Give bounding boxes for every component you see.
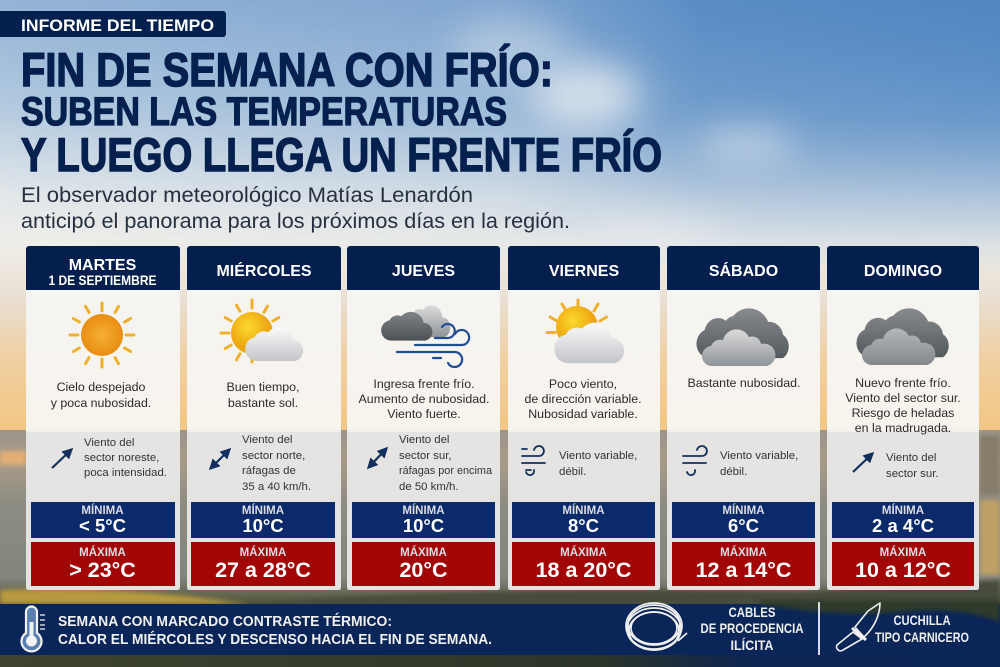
footer band <box>0 600 1000 655</box>
maximum temperature: MÁXIMA <box>720 546 767 559</box>
panel: viernes <box>508 246 660 590</box>
text: description: Cielo despejado <box>57 380 146 394</box>
panel: jueves <box>347 246 500 590</box>
text: footer message: SEMANA CON MARCADO CONTRASTE TÉRMICO: <box>58 613 392 630</box>
text: wind: Viento del <box>242 434 292 446</box>
maximum temperature: 20°C <box>399 558 448 582</box>
minimum temperature: MÍNIMA <box>882 504 924 517</box>
header: miércoles <box>187 246 341 290</box>
text: description <box>524 377 642 421</box>
maximum temperature: MÁXIMA <box>240 546 286 559</box>
text: wind <box>886 452 939 480</box>
text: description <box>51 380 151 410</box>
header: domingo <box>827 246 979 290</box>
icon: sun behind cloud <box>547 300 624 363</box>
panel: domingo <box>827 246 979 590</box>
text: wind <box>84 437 167 479</box>
text: wind: Viento del <box>399 434 449 446</box>
panel: sábado <box>667 246 820 590</box>
icon: sun <box>70 303 134 367</box>
text: description: y poca nubosidad. <box>51 396 151 410</box>
header: martes <box>26 246 180 290</box>
text: wind: de 50 km/h. <box>399 481 459 493</box>
tag: informe del tiempo <box>0 11 226 37</box>
icon: storm clouds <box>696 308 789 366</box>
minimum temperature: MÍNIMA <box>242 504 284 517</box>
icon: wind arrow <box>853 454 872 472</box>
text: cables: ILÍCITA <box>730 637 774 653</box>
text: wind <box>399 434 493 493</box>
title <box>21 43 662 181</box>
text: description: Bastante nubosidad. <box>688 376 800 390</box>
maximum temperature: 18 a 20°C <box>536 558 631 582</box>
text: footer message <box>58 613 492 648</box>
text: wind: sector sur, <box>399 450 452 462</box>
tag: informe del tiempo: INFORME DEL TIEMPO <box>21 16 214 35</box>
maximum temperature <box>832 542 974 586</box>
text: cables: DE PROCEDENCIA <box>700 620 804 636</box>
minimum temperature: MÍNIMA <box>722 504 765 517</box>
subtitle: El observador meteorológico Matías Lenardón <box>21 184 473 207</box>
minimum temperature: 2 a 4°C <box>872 515 934 536</box>
text: description <box>845 376 961 435</box>
text: wind: sector norte, <box>242 450 305 462</box>
minimum temperature <box>832 502 974 538</box>
minimum temperature: MÍNIMA <box>562 504 605 517</box>
panel: miércoles <box>187 246 341 590</box>
title: FIN DE SEMANA CON FRÍO: <box>21 43 553 96</box>
text: wind: 35 a 40 km/h. <box>242 481 311 493</box>
icon: light wind <box>522 446 545 475</box>
icon: cable coil <box>626 603 687 650</box>
subtitle <box>21 184 570 233</box>
minimum temperature <box>31 502 175 538</box>
text: description: de dirección variable. <box>524 392 642 406</box>
text: description <box>359 377 489 421</box>
text: wind: Viento variable, <box>559 450 637 462</box>
text: description: en la madrugada. <box>855 421 951 435</box>
maximum temperature: MÁXIMA <box>79 546 126 559</box>
text: description: Riesgo de heladas <box>852 406 954 420</box>
text: knife: TIPO CARNICERO <box>875 629 969 645</box>
minimum temperature: 8°C <box>568 515 599 536</box>
minimum temperature: MÍNIMA <box>81 504 124 517</box>
header: sábado <box>667 246 820 290</box>
text: wind: Viento del <box>84 437 134 449</box>
header: domingo: DOMINGO <box>864 263 942 280</box>
maximum temperature: 12 a 14°C <box>696 558 791 582</box>
panel: martes <box>26 246 180 590</box>
text: wind: ráfagas por encima <box>399 465 493 477</box>
maximum temperature: > 23°C <box>69 558 136 582</box>
minimum temperature: 10°C <box>403 515 444 536</box>
icon: storm clouds <box>856 308 949 365</box>
text: knife: CUCHILLA <box>894 612 950 628</box>
header: jueves: JUEVES <box>392 263 455 280</box>
text: description: Ingresa frente frío. <box>373 377 475 391</box>
text: wind: Viento variable, <box>720 450 798 462</box>
minimum temperature <box>672 502 815 538</box>
text: knife <box>875 612 969 645</box>
text: description: Viento del sector sur. <box>845 391 961 405</box>
title: Y LUEGO LLEGA UN FRENTE FRÍO <box>21 128 662 181</box>
icon: double arrow <box>369 449 386 467</box>
text: description: Buen tiempo, <box>226 380 300 394</box>
text: description <box>226 380 300 410</box>
title: SUBEN LAS TEMPERATURAS <box>21 90 507 134</box>
header: jueves <box>347 246 500 290</box>
maximum temperature <box>352 542 495 586</box>
text: description: bastante sol. <box>228 396 298 410</box>
text: cables <box>700 604 804 653</box>
text: footer message: CALOR EL MIÉRCOLES Y DESCENSO HACIA EL FIN DE SEMANA. <box>58 631 492 648</box>
icon: clouds and wind <box>381 305 469 367</box>
text: wind: sector noreste, <box>84 452 159 464</box>
maximum temperature: MÁXIMA <box>400 546 447 559</box>
minimum temperature: 10°C <box>242 515 284 536</box>
text: description: Nuevo frente frío. <box>855 376 951 390</box>
minimum temperature <box>512 502 655 538</box>
maximum temperature <box>512 542 655 586</box>
text: wind <box>720 450 798 478</box>
minimum temperature: < 5°C <box>79 515 126 536</box>
text: wind: poca intensidad. <box>84 467 167 479</box>
maximum temperature <box>31 542 175 586</box>
text: wind <box>559 450 637 478</box>
text: wind <box>242 434 311 493</box>
text: description: Aumento de nubosidad. <box>359 392 489 406</box>
header: martes: 1 DE SEPTIEMBRE <box>48 272 156 288</box>
text: wind: Viento del <box>886 452 936 464</box>
text: wind: sector sur. <box>886 468 939 480</box>
maximum temperature: 10 a 12°C <box>855 558 951 582</box>
text: wind: débil. <box>720 466 747 478</box>
maximum temperature: 27 a 28°C <box>215 558 311 582</box>
header: viernes <box>508 246 660 290</box>
icon: double arrow <box>211 450 229 468</box>
icon: sun with cloud <box>221 300 303 362</box>
icon: knife <box>837 603 880 651</box>
text: wind: débil. <box>559 466 586 478</box>
subtitle: anticipó el panorama para los próximos días en la región. <box>21 210 570 233</box>
minimum temperature <box>352 502 495 538</box>
maximum temperature <box>191 542 335 586</box>
header: miércoles: MIÉRCOLES <box>216 261 312 280</box>
text: description: Poco viento, <box>549 377 617 391</box>
maximum temperature: MÁXIMA <box>560 546 607 559</box>
header: sábado: SÁBADO <box>709 261 778 280</box>
minimum temperature: 6°C <box>728 515 759 536</box>
icon: wind arrow <box>52 450 71 468</box>
text: wind: ráfagas de <box>242 465 296 477</box>
header: martes: MARTES <box>69 257 137 274</box>
header: viernes: VIERNES <box>549 263 619 280</box>
icon: light wind <box>683 446 707 475</box>
text: description: Nubosidad variable. <box>528 407 638 421</box>
minimum temperature: MÍNIMA <box>402 504 445 517</box>
text: description: Viento fuerte. <box>387 407 461 421</box>
maximum temperature <box>672 542 815 586</box>
minimum temperature <box>191 502 335 538</box>
text: cables: CABLES <box>728 604 776 620</box>
icon: thermometer <box>22 606 45 651</box>
maximum temperature: MÁXIMA <box>880 546 926 559</box>
